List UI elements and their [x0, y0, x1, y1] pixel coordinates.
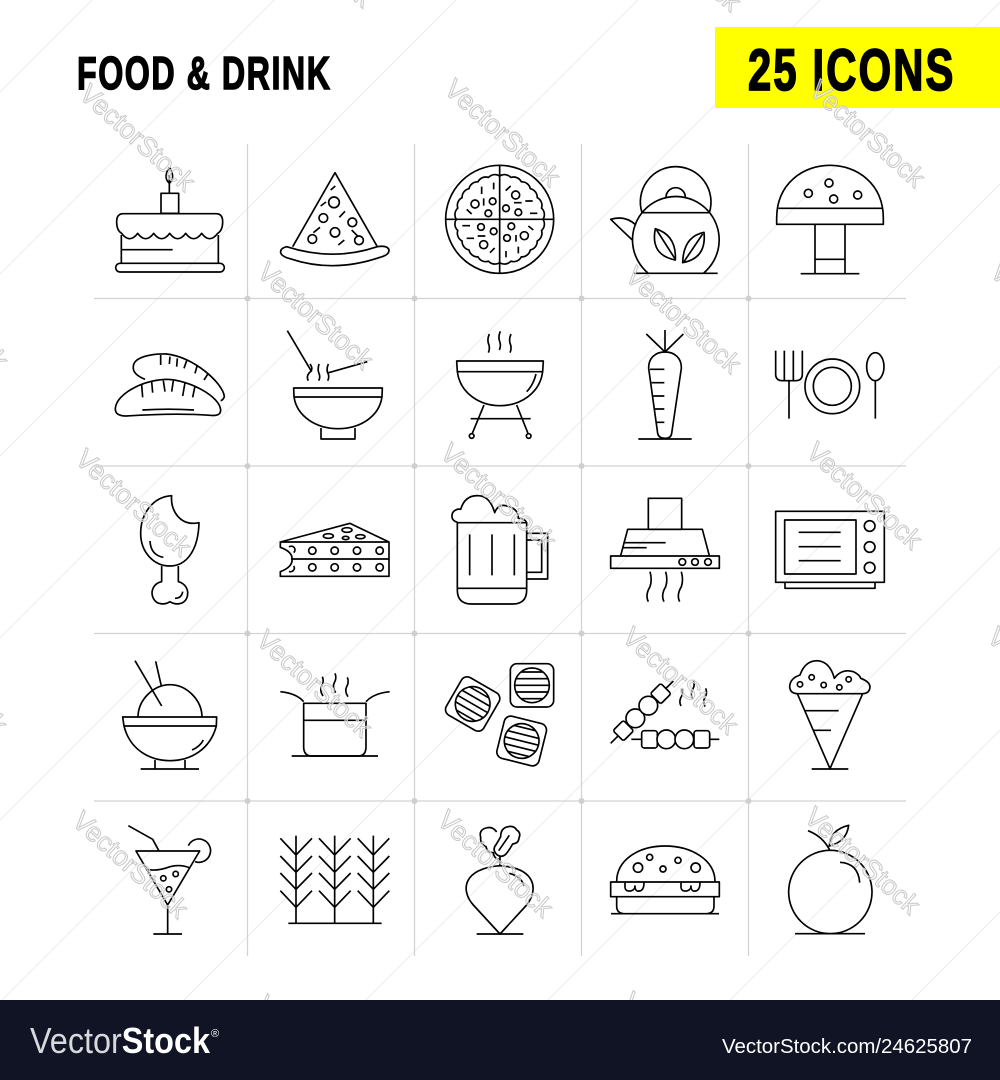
icon: mushroom: [777, 165, 883, 274]
watermarks: VectorStock: [439, 73, 566, 192]
icon: bread: [115, 354, 224, 416]
icon: soup bowl: [287, 331, 382, 439]
icon: wheat: [280, 836, 389, 923]
icon: ice cream cone: [790, 661, 870, 769]
footer logo: VectorStock: [30, 1020, 211, 1061]
icon: beetroot: [466, 826, 533, 934]
icon: barbecue grill: [457, 331, 543, 438]
icon: cocktail: [128, 826, 211, 934]
icon: burger: [611, 846, 719, 914]
icon: carrot: [638, 330, 692, 439]
icon: skewers: [611, 680, 719, 749]
watermarks: VectorStock: [435, 437, 562, 556]
icon: orange fruit: [789, 825, 872, 934]
watermarks: VectorStock: [804, 74, 931, 193]
icon: rice bowl with chopsticks: [123, 661, 217, 769]
watermarks: VectorStock: [620, 260, 747, 379]
icon: birthday cake: [116, 167, 224, 272]
watermarks: VectorStock: [432, 804, 559, 923]
icon: pizza slice: [281, 173, 389, 266]
icon: kitchen hood: [611, 498, 719, 602]
icon: beer mug: [452, 496, 548, 604]
icon: grilled patties: [443, 664, 554, 767]
footer bar: [0, 1000, 1000, 1080]
title: FOOD & DRINK: [77, 48, 332, 99]
icon: kettle: [611, 167, 719, 273]
watermarks: VectorStock: [617, 621, 744, 740]
yellow badge: [715, 27, 1000, 108]
watermarks: VectorStock: [252, 256, 379, 375]
watermarks: VectorStock: [70, 443, 197, 562]
icon: cooking pot: [280, 673, 390, 756]
footer bar: ®: [211, 1028, 219, 1040]
icon: whole pizza: [446, 165, 554, 273]
icon: cheese: [280, 523, 389, 576]
icon: oven: [776, 511, 884, 588]
watermarks: VectorStock: [251, 624, 378, 743]
icon: plate and cutlery: [776, 351, 884, 419]
watermarks: VectorStock: [74, 78, 201, 197]
footer image id: VectorStock.com/24625807: [722, 1036, 972, 1058]
icon: chicken leg: [141, 496, 199, 604]
watermarks: VectorStock: [67, 805, 194, 924]
watermarks: VectorStock: [799, 801, 926, 920]
yellow badge: 25 ICONS: [748, 37, 956, 103]
icon grid: [115, 165, 884, 934]
watermarks: VectorStock: [801, 436, 928, 555]
